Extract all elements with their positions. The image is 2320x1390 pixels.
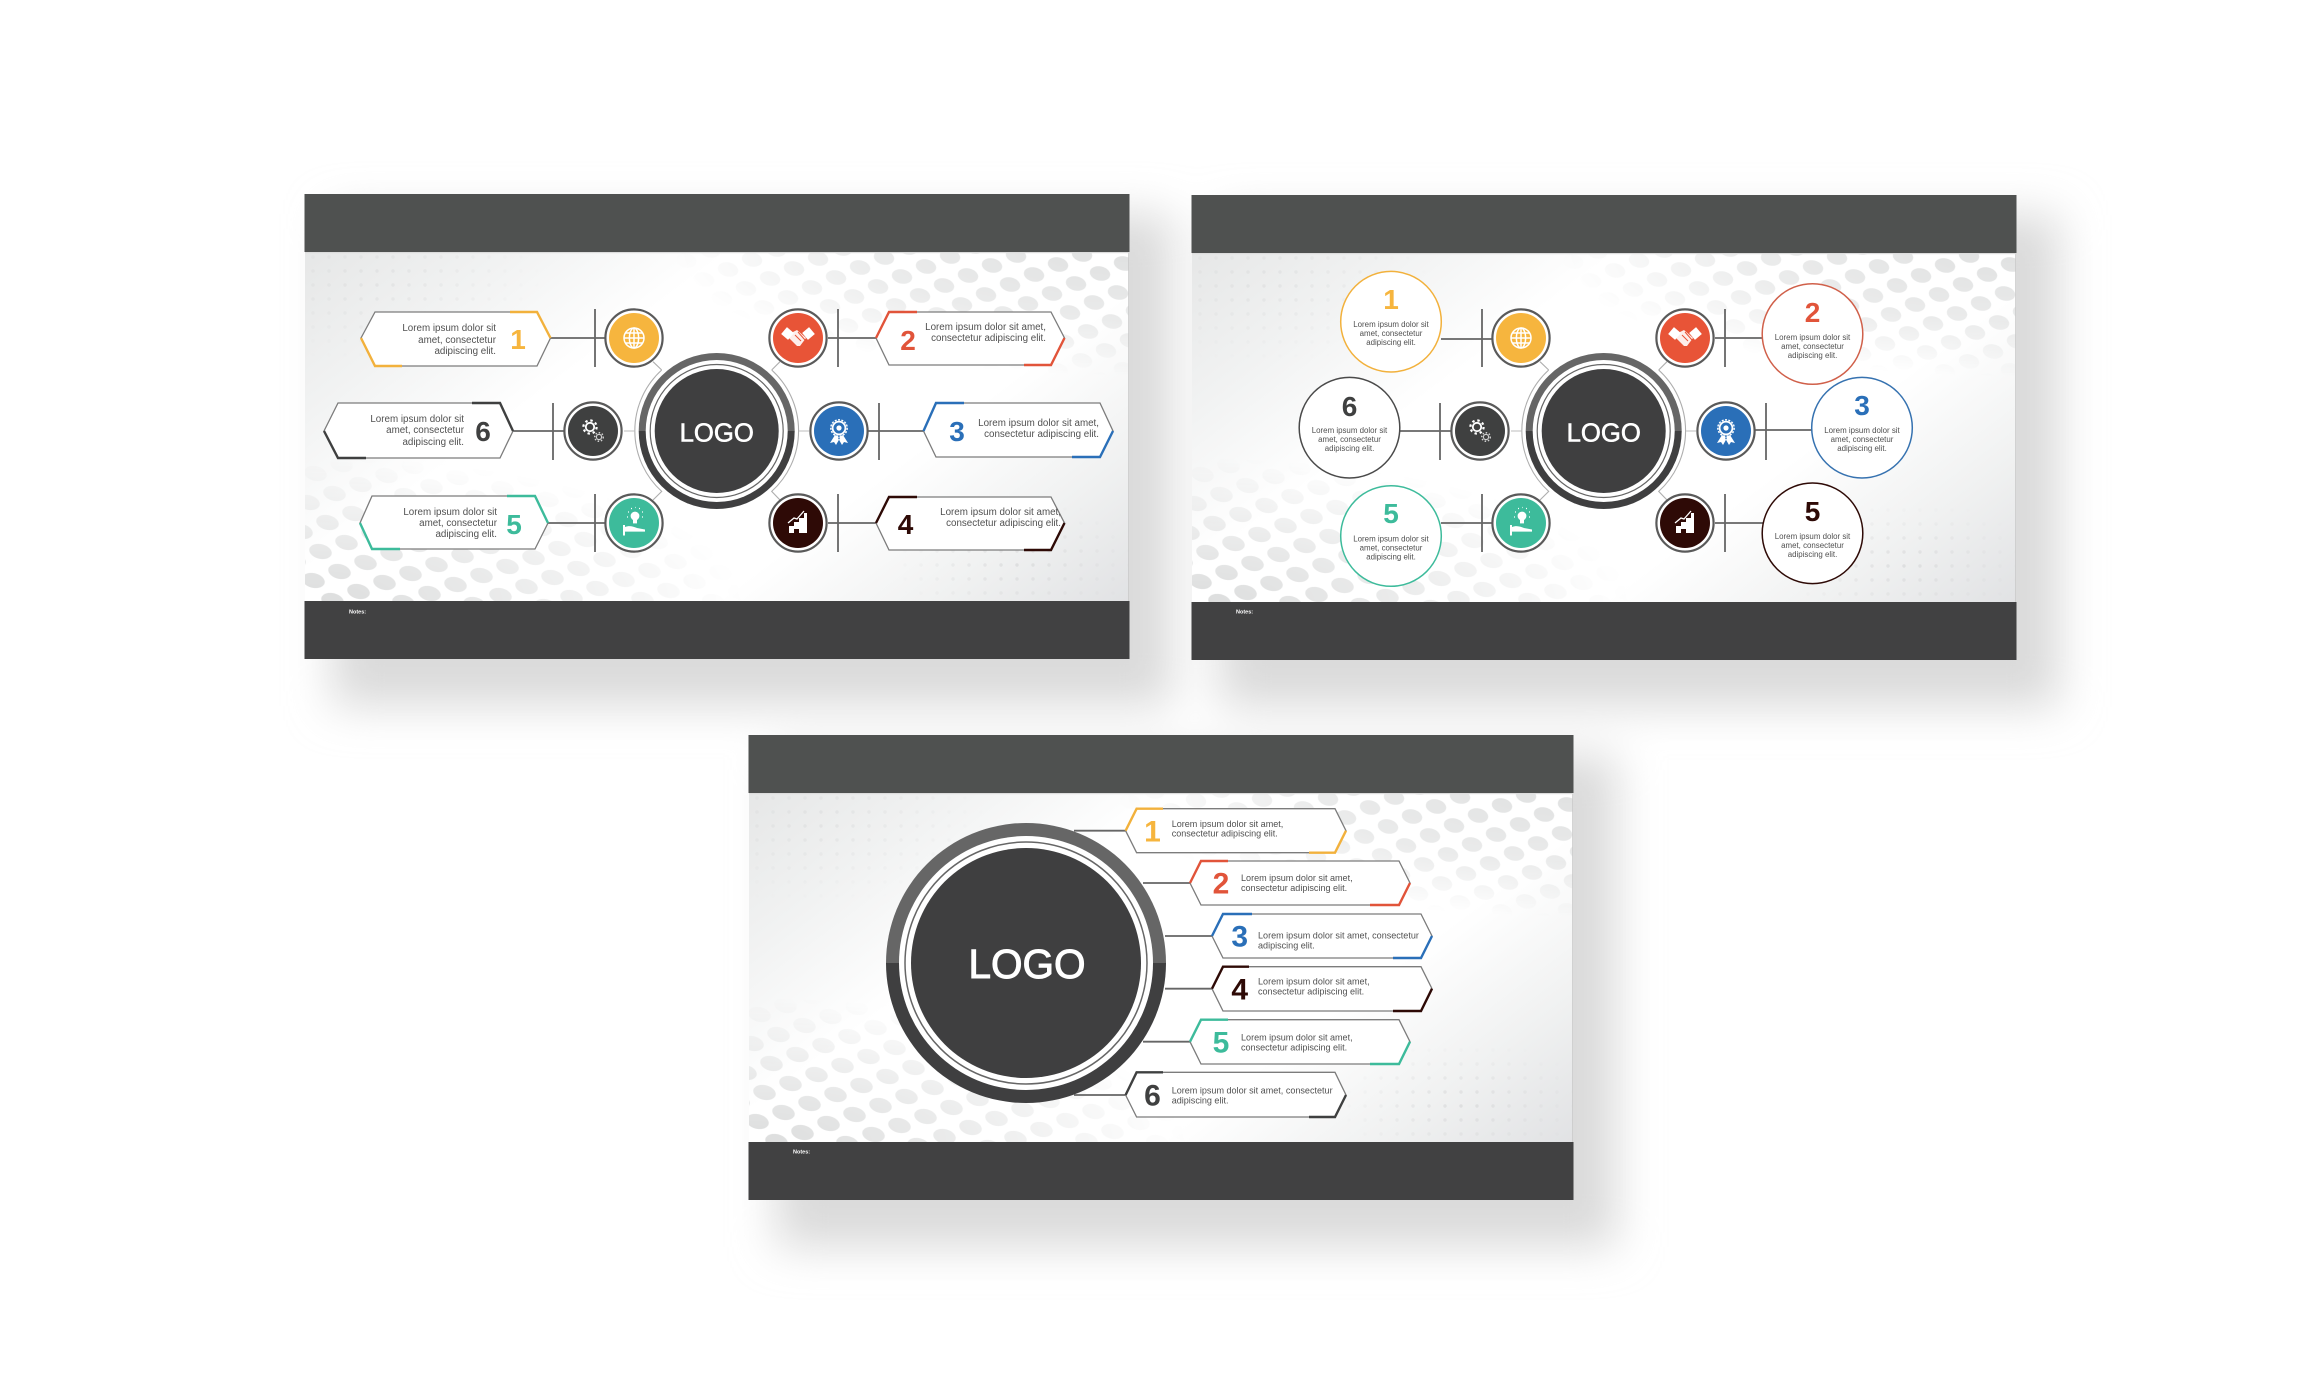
- circle maroon, numbered 5 in the reference: 5: [1805, 496, 1820, 527]
- circle 6: 6: [1342, 391, 1357, 422]
- circle 2: 2: [1805, 297, 1820, 328]
- label 1 hexagon: amet, consectetur: [418, 335, 497, 346]
- circle 3: amet, consectetur: [1831, 435, 1894, 444]
- logo wordmark: LOGO: [1567, 420, 1641, 448]
- slide 3 label 2: [1190, 861, 1410, 905]
- slide shadows: [332, 214, 2059, 1247]
- label 5 hexagon: Lorem ipsum dolor sit: [403, 507, 497, 518]
- label 5 hexagon: 5: [506, 509, 522, 540]
- label 5 hexagon: amet, consectetur: [419, 518, 498, 529]
- label 1 hexagon: adipiscing elit.: [434, 346, 496, 357]
- slide 3 label 1: Lorem ipsum dolor sit amet,: [1172, 819, 1283, 829]
- slide 2 background with header and footer bars: [1192, 195, 2016, 660]
- label 2 hexagon: 2: [900, 325, 916, 356]
- slide 3 label 1: 1: [1144, 816, 1161, 848]
- circle 3: 3: [1854, 390, 1870, 421]
- label 4 hexagon: Lorem ipsum dolor sit amet,: [940, 507, 1061, 518]
- label 6 hexagon: Lorem ipsum dolor sit: [370, 414, 464, 425]
- label 2 hexagon: consectetur adipiscing elit.: [931, 333, 1046, 344]
- slide 1 background with header and footer bars: [304, 194, 1130, 659]
- node 6: gears icon: [513, 402, 622, 460]
- slide 3 label 1: [1126, 809, 1346, 853]
- label 5 hexagon: adipiscing elit.: [435, 529, 497, 540]
- node 1: globe icon: [550, 309, 663, 367]
- circle 6: adipiscing elit.: [1325, 444, 1374, 453]
- slide 3 label 1: consectetur adipiscing elit.: [1172, 829, 1278, 839]
- slide 3 large logo disc: [886, 823, 1166, 1103]
- slide 3 label 6: [1126, 1072, 1346, 1117]
- central logo disc: [639, 353, 795, 509]
- circle maroon, numbered 5 in the reference: [1762, 483, 1863, 584]
- circle teal 5: 5: [1383, 498, 1399, 529]
- label 6 hexagon: [324, 403, 513, 458]
- circle teal 5: Lorem ipsum dolor sit: [1353, 534, 1430, 544]
- label 3 hexagon: consectetur adipiscing elit.: [984, 429, 1099, 440]
- node 4: growth icon: [769, 494, 876, 552]
- panel: slide 3, large hub with stacked labels: [748, 735, 1574, 1200]
- slide 3 label 5: 5: [1213, 1026, 1229, 1060]
- label 1 hexagon: Lorem ipsum dolor sit: [402, 323, 496, 334]
- node 6: gears icon: [1400, 402, 1509, 460]
- slide 3 background with header and footer bars: [748, 735, 1574, 1200]
- circle 3: Lorem ipsum dolor sit: [1824, 426, 1901, 435]
- slide 3 label 2: Lorem ipsum dolor sit amet,: [1241, 873, 1353, 883]
- slide 1 hub and spokes: [513, 309, 924, 552]
- circle 2: [1762, 284, 1863, 384]
- label 5 hexagon: [360, 496, 548, 549]
- slide 3 label 2: 2: [1213, 868, 1229, 900]
- slide 3 label 5: consectetur adipiscing elit.: [1241, 1042, 1347, 1052]
- node 5: idea in hand icon: [548, 494, 663, 552]
- node 3: ribbon icon: [1697, 402, 1812, 460]
- slide 3 label 5: [1190, 1020, 1410, 1064]
- slide 3 label 4: consectetur adipiscing elit.: [1258, 986, 1364, 996]
- slide 3 label 3: adipiscing elit.: [1258, 940, 1315, 950]
- label 4 hexagon: consectetur adipiscing elit.: [946, 518, 1061, 529]
- circle 2: amet, consectetur: [1781, 342, 1844, 351]
- circle teal 5: amet, consectetur: [1360, 544, 1423, 552]
- circle 6: Lorem ipsum dolor sit: [1312, 426, 1388, 435]
- slide 3 label 4: Lorem ipsum dolor sit amet,: [1258, 977, 1370, 987]
- slide 3 label 5: Lorem ipsum dolor sit amet,: [1241, 1033, 1353, 1043]
- label 6 hexagon: amet, consectetur: [386, 425, 465, 436]
- panel: slide 2, circle labels around hub: [1192, 195, 2016, 660]
- slide 3 notes label: Notes:: [793, 1150, 810, 1156]
- label 1 hexagon: 1: [510, 324, 526, 355]
- node 2: handshake icon: [769, 309, 876, 367]
- circle 1: amet, consectetur: [1360, 329, 1423, 338]
- circle 3: adipiscing elit.: [1837, 444, 1887, 453]
- node 5: idea in hand icon: [1441, 494, 1550, 552]
- label 3 hexagon: 3: [949, 416, 965, 447]
- slide 2 hub and spokes: [1400, 309, 1812, 552]
- slide 3 label 6: Lorem ipsum dolor sit amet, consectetur: [1172, 1086, 1333, 1096]
- hub connector arcs: [624, 362, 809, 500]
- large logo wordmark: LOGO: [968, 941, 1086, 987]
- slide 1 notes label: Notes:: [349, 610, 366, 616]
- label 6 hexagon: 6: [475, 416, 491, 447]
- node 3: ribbon icon: [810, 402, 924, 460]
- node 2: handshake icon: [1656, 309, 1763, 367]
- slide 3 label 3: 3: [1231, 920, 1248, 954]
- label 3 hexagon: Lorem ipsum dolor sit amet,: [978, 418, 1099, 429]
- label 1 hexagon: [361, 312, 550, 366]
- label 2 hexagon: [876, 312, 1064, 365]
- slide 3 connectors: [1074, 831, 1212, 1095]
- circle 6: [1299, 377, 1400, 478]
- circle 2: Lorem ipsum dolor sit: [1775, 333, 1851, 342]
- circle maroon, numbered 5 in the reference: amet, consectetur: [1781, 541, 1844, 550]
- circle teal 5: adipiscing elit.: [1366, 552, 1416, 562]
- node 1: globe icon: [1441, 309, 1550, 367]
- circle 1: Lorem ipsum dolor sit: [1353, 320, 1430, 329]
- label 4 hexagon: 4: [898, 509, 914, 540]
- label 3 hexagon: [924, 403, 1113, 457]
- circle maroon, numbered 5 in the reference: adipiscing elit.: [1788, 550, 1837, 559]
- slide 3 label 2: consectetur adipiscing elit.: [1241, 883, 1347, 893]
- label 4 hexagon: [876, 497, 1064, 550]
- circle 1: [1341, 271, 1441, 372]
- circle maroon, numbered 5 in the reference: Lorem ipsum dolor sit: [1775, 532, 1851, 541]
- slide 3 label 3: Lorem ipsum dolor sit amet, consectetur: [1258, 931, 1419, 941]
- slide 3 label 6: 6: [1144, 1080, 1161, 1112]
- central logo disc: [1526, 353, 1682, 509]
- circle 1: adipiscing elit.: [1366, 338, 1416, 347]
- hub connector arcs: [1511, 362, 1696, 500]
- circle 6: amet, consectetur: [1318, 435, 1381, 444]
- logo wordmark: LOGO: [680, 420, 754, 448]
- circle 1: 1: [1383, 284, 1399, 315]
- node 4: growth icon: [1656, 494, 1763, 552]
- label 6 hexagon: adipiscing elit.: [402, 437, 464, 448]
- slide 3 label 4: [1212, 967, 1432, 1011]
- slide 3 label 4: 4: [1231, 974, 1248, 1006]
- panel: slide 1, hexagon labels around hub: [304, 194, 1130, 659]
- circle teal 5: [1341, 486, 1441, 586]
- slide 3 label 3: [1212, 914, 1432, 958]
- label 2 hexagon: Lorem ipsum dolor sit amet,: [925, 322, 1046, 333]
- circle 3: [1812, 377, 1912, 478]
- slide 3 label 6: adipiscing elit.: [1172, 1095, 1229, 1105]
- slide 2 notes label: Notes:: [1236, 610, 1253, 616]
- circle 2: adipiscing elit.: [1788, 351, 1837, 360]
